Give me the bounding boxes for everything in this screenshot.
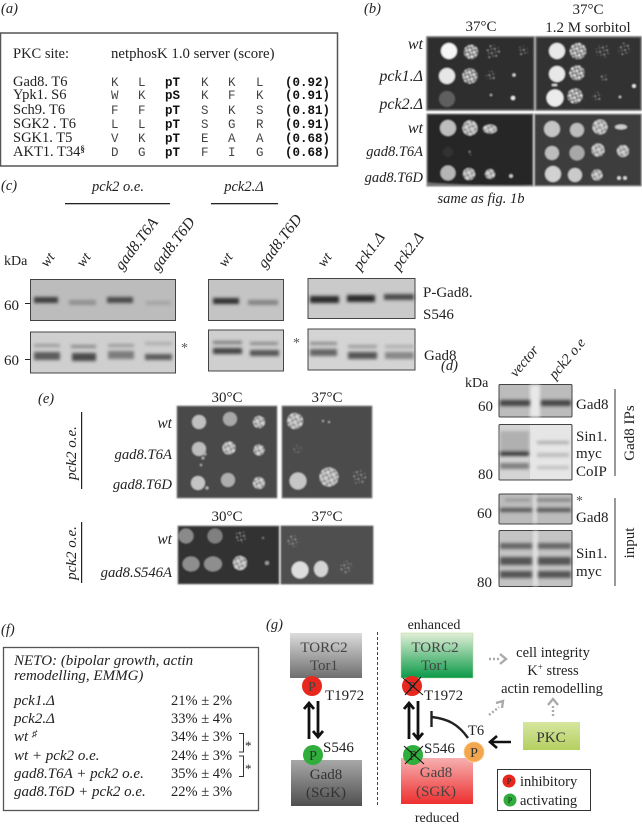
row Sch9: S [201,104,209,118]
lane label vector: vector [507,342,543,381]
green P left [303,745,323,765]
heading 37C sorbitol: 37°C [572,2,604,18]
lane labels: gad8.T6D [255,211,306,271]
table heading: PKC site: [13,46,69,62]
row SGK1: SGK1. T5 [13,130,72,146]
legend [498,770,590,810]
table heading: NETO: (bipolar growth, actin [13,653,193,669]
panel f: NETO table [1,622,258,810]
markers [477,399,493,591]
row Gad8: K [201,76,209,90]
rows: 33% ± 4% [171,711,232,727]
legend inhibitory: inhibitory [520,774,578,790]
row Ypk1: K [256,89,264,103]
row SGK1: (0.68) [285,132,330,146]
outcomes text: K [527,663,538,679]
bracket input: input [622,527,638,558]
crossed green P: P [409,749,417,764]
row Sch9: Sch9. T6 [13,102,65,118]
plate top right [536,37,641,110]
row AKT1: I [228,146,236,160]
row SGK2: S [201,118,209,132]
size markers: 60 [4,298,19,314]
heading 37C sorbitol [545,2,631,36]
lane labels [4,211,428,274]
box Gad8 red [401,758,473,804]
row Gad8: L [256,76,264,90]
blot labels: Gad8 [576,397,608,413]
rows: pck1.Δ [13,693,55,709]
lane labels: wt [215,249,237,270]
strain labels: wt [408,36,424,53]
group heading pck2.Δ [211,179,278,204]
box TORC2 green: Tor1 [421,658,449,674]
significance brackets [239,734,252,776]
heading 37C: 37°C [465,19,497,35]
side label bottom: pck2 o.e. [64,526,80,581]
label enhanced: enhanced [408,618,460,633]
row Gad8: K [111,76,119,90]
row AKT1: pT [165,146,181,160]
lane labels: gad8.T6A [112,214,162,273]
crossed red P [402,676,423,696]
row Gad8: (0.92) [285,76,330,90]
plate top left [427,37,534,110]
markers: 60 [477,506,492,522]
row Sch9: pT [165,104,181,118]
size markers: 60 [4,353,19,369]
strain labels: gad8.T6D [365,170,424,186]
strain labels [365,36,424,186]
panel g: signalling model [266,617,603,825]
plate 37C top [282,406,372,498]
server heading: netphosK 1.0 server (score) [111,46,275,62]
table box [0,33,338,166]
divider [376,632,378,806]
red P left: P [308,680,316,695]
outcomes text: actin remodelling [501,681,603,697]
rows [13,693,232,800]
significance brackets: * [245,761,252,776]
asterisk 1: * [181,341,188,356]
row SGK2: L [111,118,119,132]
panel a: PKC site table [0,1,338,166]
box TORC2 grey [290,633,362,678]
blot labels: Gad8 [576,510,608,526]
strain labels [101,415,173,581]
rows: ♯ [31,729,38,740]
blot label P-Gad8: S546 [423,307,454,323]
rows: 22% ± 3% [171,784,232,800]
strain labels: wt [157,415,173,432]
rows: pck2.Δ [13,711,55,727]
outcomes text: + [538,662,543,672]
box Gad8 grey [291,760,362,806]
blot labels: Sin1. [576,429,607,445]
bracket input [614,498,638,586]
label S546 left: S546 [323,740,354,756]
orange P: P [470,746,478,761]
lane labels: wt [314,249,336,270]
panel b: spot assays [364,1,642,207]
box Gad8 grey: Gad8 [310,767,342,783]
group heading pck2 o.e.: pck2 o.e. [91,179,144,195]
strain labels: wt [157,531,173,548]
row SGK2: R [256,118,264,132]
box TORC2 grey: Tor1 [310,658,338,674]
blot Sin1 CoIP [499,424,572,480]
lane label pck2 o.e: pck2 o.e [545,335,589,383]
arrows right [404,701,423,739]
note: same as fig. 1b [438,191,524,207]
strain labels: pck2.Δ [378,96,423,113]
plate bottom right [534,114,642,186]
blot P-Gad8 group 3 [308,278,415,318]
row Gad8: L [138,76,146,90]
row Sch9: K [228,104,236,118]
blot label P-Gad8: P-Gad8. [423,285,473,301]
row AKT1 [13,144,330,160]
row Ypk1: W [111,89,119,103]
blot P-Gad8 group 2 [208,280,284,320]
bracket Gad8 IPs: Gad8 IPs [622,405,638,461]
blot labels: myc [576,446,602,462]
row SGK2: pT [165,118,181,132]
row Gad8 [13,74,330,90]
blot Gad8 input [499,494,572,524]
strain labels: gad8.T6A [366,144,423,160]
blot Gad8 group 1 [30,332,176,373]
table heading: remodelling, EMMG) [14,668,143,684]
row SGK1: A [256,132,264,146]
bracket Gad8 IPs [614,389,638,476]
label d: (d) [441,358,458,374]
label T1972 left: T1972 [325,688,364,704]
blot labels [576,397,608,580]
side label top: pck2 o.e. [64,426,80,481]
row SGK1: pT [165,132,181,146]
rows: gad8.T6A + pck2 o.e. [14,766,144,782]
lane labels: wt [37,249,59,270]
row Ypk1: Ypk1. S6 [13,87,66,103]
label e: (e) [38,391,54,407]
plate 30C top [177,406,277,498]
row SGK2: SGK2 . T6 [13,116,76,132]
table box [4,648,258,810]
label f: (f) [1,622,15,638]
row SGK2: (0.91) [285,118,330,132]
label T6: T6 [468,723,484,739]
row AKT1: AKT1. T34 [13,144,80,160]
blot P-Gad8 group 1 [30,280,176,320]
row Ypk1: F [228,89,236,103]
rows: gad8.T6D + pck2 o.e. [14,784,146,800]
blot label Gad8: Gad8 [424,348,456,364]
row Sch9 [13,102,330,118]
row AKT1: G [256,146,264,160]
heading 37C sorbitol: 1.2 M sorbitol [545,20,631,36]
legend activating: activating [520,793,577,809]
strain labels: gad8.T6D [113,477,172,493]
row Sch9: F [111,104,119,118]
group heading pck2.Δ: pck2.Δ [223,179,264,195]
PKC box: PKC [536,730,566,746]
temperature headings: 30°C [211,509,243,525]
row Ypk1: (0.91) [285,89,330,103]
row Sch9: (0.81) [285,104,330,118]
temperature headings: 37°C [311,509,343,525]
row SGK1: V [111,132,119,146]
box Gad8 grey: (SGK) [306,785,346,801]
blot labels: myc [576,564,602,580]
grey dashed arrow 2 [489,701,503,715]
lane labels: pck2.Δ [388,229,428,274]
temperature headings [211,390,343,525]
box TORC2 green: TORC2 [411,640,459,656]
blot Gad8 group 2 [208,330,284,371]
strain labels: pck1.Δ [378,68,423,85]
rows: 21% ± 2% [171,693,232,709]
row SGK1: E [201,132,209,146]
row AKT1: D [111,146,119,160]
rows: 24% ± 3% [171,748,232,764]
plate 37C bottom [281,526,373,584]
box TORC2 grey: TORC2 [300,640,348,656]
row AKT1: (0.68) [285,146,330,160]
row SGK2: L [138,118,146,132]
row SGK2 [13,116,330,132]
box TORC2 green [401,633,473,678]
row SGK2: G [228,118,236,132]
outcomes text: cell integrity [516,645,591,661]
lane labels: wt [73,249,95,270]
blot labels: Sin1. [576,546,607,562]
green P left: P [309,749,317,764]
label c: (c) [1,178,17,194]
blot Gad8 group 3 [308,329,415,370]
box Gad8 red: (SGK) [416,784,456,800]
grey dashed arrow 3 [548,699,558,716]
lane labels: gad8.T6D [148,214,199,274]
outcomes text [501,645,603,697]
blot label P-Gad8 [423,285,473,323]
rows: 34% ± 3% [171,729,232,745]
rows: wt + pck2 o.e. [14,748,100,764]
crossed red P: P [408,680,416,695]
blot Gad8 IP [499,384,572,417]
grey dashed arrow 1 [489,654,506,664]
markers: 60 [478,399,493,415]
strain labels: gad8.T6A [114,447,173,463]
row SGK1: A [228,132,236,146]
temperature headings: 30°C [211,390,243,406]
row AKT1: G [138,146,146,160]
row Ypk1: K [138,89,146,103]
group heading pck2 o.e. [65,179,170,204]
markers: 80 [478,467,493,483]
panel d: co-IP blots [441,335,638,591]
row Gad8: K [228,76,236,90]
row Sch9: S [256,104,264,118]
outcomes text: stress [543,663,579,679]
rows: wt [14,729,28,745]
blot Sin1 input [499,530,572,586]
box Gad8 red: Gad8 [420,765,452,781]
kDa: kDa [465,376,489,391]
size markers [4,298,30,369]
row SGK1 [13,130,330,146]
lane labels: kDa [4,254,28,269]
temperature headings: 37°C [311,390,343,406]
table heading [13,653,193,684]
blot labels: * [576,494,583,509]
rows: 35% ± 4% [171,766,232,782]
legend activating: P [508,796,513,805]
lane labels: pck1.Δ [349,229,389,274]
row Ypk1: pS [165,89,181,103]
inhibition bar [432,711,468,738]
row AKT1: F [201,146,209,160]
label S546 right: S546 [424,741,455,757]
row Gad8: pT [165,76,181,90]
label b: (b) [364,1,381,17]
strain labels: gad8.S546A [101,565,173,581]
plate 30C bottom [178,526,279,584]
orange P [464,742,484,762]
significance brackets: * [245,738,252,753]
legend inhibitory: P [507,777,512,786]
panel e: spot assays with pck2 overexpression [38,390,373,584]
PKC box [523,722,580,750]
blot labels: CoIP [576,464,607,480]
label a: (a) [1,1,18,17]
row SGK1: K [138,132,146,146]
plate bottom left [427,114,533,186]
red P left [302,676,322,696]
asterisk 2: * [293,336,300,351]
row Ypk1 [13,87,330,103]
crossed green P [403,745,424,765]
PKC arrow [490,736,511,748]
label g: (g) [266,617,283,633]
row Gad8: Gad8. T6 [13,74,68,90]
arrows left [304,701,323,739]
strain labels: wt [408,120,424,137]
markers: 80 [477,575,492,591]
label T1972 right: T1972 [424,688,463,704]
side label top [64,412,82,489]
row Sch9: F [138,104,146,118]
panel c: western blots [1,178,473,373]
row AKT1: § [80,144,85,154]
row Ypk1: K [201,89,209,103]
